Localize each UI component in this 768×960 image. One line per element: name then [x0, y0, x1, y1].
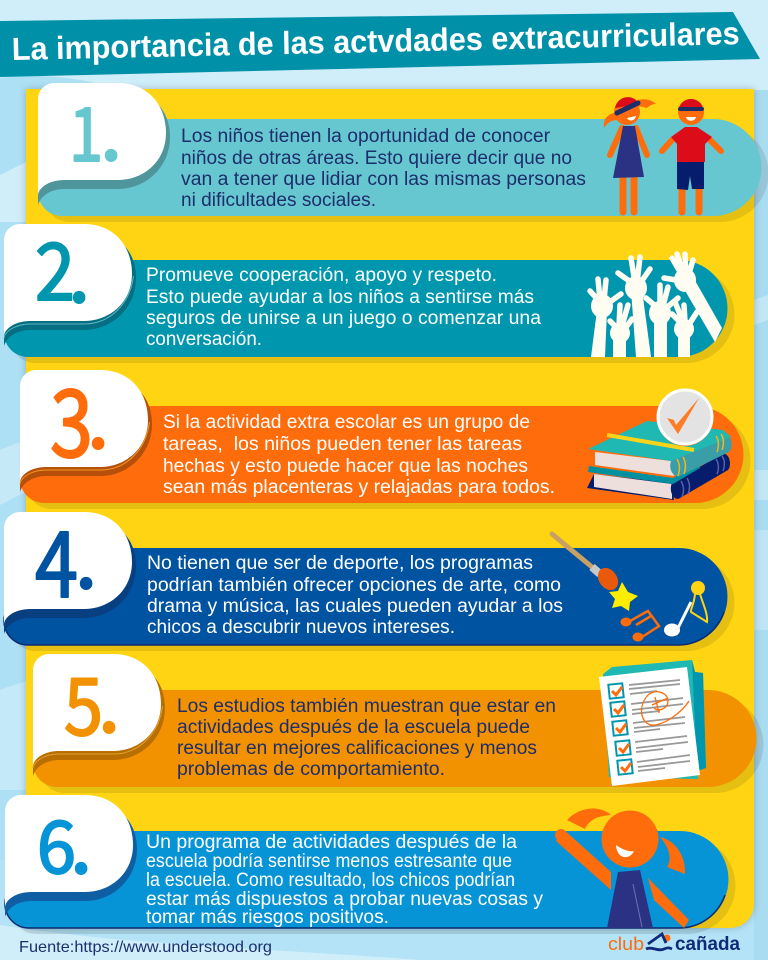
text: item 2: seguros de unirse a un juego o comenzar una — [146, 308, 541, 329]
number 2: 2 — [35, 208, 75, 323]
text: item 1: niños de otras áreas. Esto quiere decir que no — [181, 148, 572, 169]
text: item 1: ni dificultades sociales. — [181, 190, 376, 211]
text: item 2: Esto puede ayudar a los niños a sentirse más — [146, 287, 534, 308]
text: item 6: Un programa de actividades después de la — [146, 832, 517, 853]
text: item 6: estar más dispuestos a probar nuevas cosas y — [146, 889, 544, 910]
panel: item 5 — [33, 640, 763, 793]
text: item 2: conversación. — [146, 329, 262, 350]
number 2: . — [68, 210, 90, 326]
text: item 5: problemas de comportamiento. — [177, 759, 445, 780]
panel: item 1 — [38, 68, 768, 222]
title ribbon — [0, 12, 760, 77]
icon: paintbrush and music notes — [552, 534, 707, 642]
text: item 4 — [147, 553, 563, 638]
text: item 6: escuela podría sentirse menos estresante que — [146, 851, 512, 872]
text: item 4: drama y música, las cuales pueden ayudar a los — [147, 596, 563, 617]
icon: children — [604, 97, 721, 212]
text: item 3: Si la actividad extra escolar es un grupo de — [163, 412, 530, 433]
panel: item 3 — [20, 349, 750, 509]
source line: Fuente:https://www.understood.org — [19, 939, 272, 956]
number 3: 3 — [50, 349, 93, 485]
icon: books and check mark — [587, 390, 732, 500]
text: item 3: tareas, los niños pueden tener las tareas — [163, 434, 522, 455]
number 4: 4 — [35, 492, 78, 624]
text: item 3: sean más placenteras y relajadas para todos. — [163, 477, 555, 498]
text: item 5 — [177, 696, 556, 780]
text: item 2 — [146, 265, 541, 350]
text: item 6: la escuela. Como resultado, los chicos podrían — [146, 870, 515, 891]
text: item 5: actividades después de la escuela puede — [177, 717, 530, 738]
text: item 4: chicos a descubrir nuevos intereses. — [147, 617, 455, 638]
number 6 — [37, 781, 92, 897]
text: item 4: podrían también ofrecer opciones de arte, como — [147, 575, 561, 596]
logo: club cañada: cañada — [675, 934, 740, 955]
text: item 3: hechas y esto puede hacer que las noches — [163, 456, 528, 477]
logo: club cañada — [608, 934, 740, 955]
panel: item 4 — [4, 492, 734, 651]
number 5: . — [98, 640, 120, 756]
text: item 4: No tienen que ser de deporte, los programas — [147, 553, 533, 574]
title: La importancia de las actvdades extracurriculares — [11, 15, 740, 67]
number 6: . — [70, 781, 92, 897]
text: item 1: van a tener que lidiar con las mismas personas — [181, 169, 586, 190]
text: item 6: tomar más riesgos positivos. — [146, 907, 389, 928]
text: item 1: Los niños tienen la oportunidad de conocer — [181, 126, 551, 147]
text: item 1 — [181, 126, 586, 211]
panel: item 2 — [4, 208, 734, 363]
logo: club cañada: club — [608, 934, 644, 954]
number 3: . — [87, 356, 109, 472]
text: item 5: Los estudios también muestran que estar en — [177, 696, 556, 717]
number 1: 1 — [69, 76, 103, 183]
icon: cheering girl — [555, 809, 689, 928]
text: item 3 — [163, 412, 555, 498]
panel: item 6 — [5, 781, 735, 934]
text: item 5: resultar en mejores calificaciones y menos — [177, 738, 537, 759]
icon: raised hands — [590, 254, 722, 357]
number 5: 5 — [64, 643, 103, 758]
number 1: . — [100, 68, 122, 184]
text: item 2: Promueve cooperación, apoyo y respeto. — [146, 265, 497, 286]
icon: graded checklist — [599, 660, 706, 786]
number 4: . — [75, 496, 97, 612]
number 6: 6 — [37, 789, 76, 894]
text: item 6 — [146, 832, 544, 928]
